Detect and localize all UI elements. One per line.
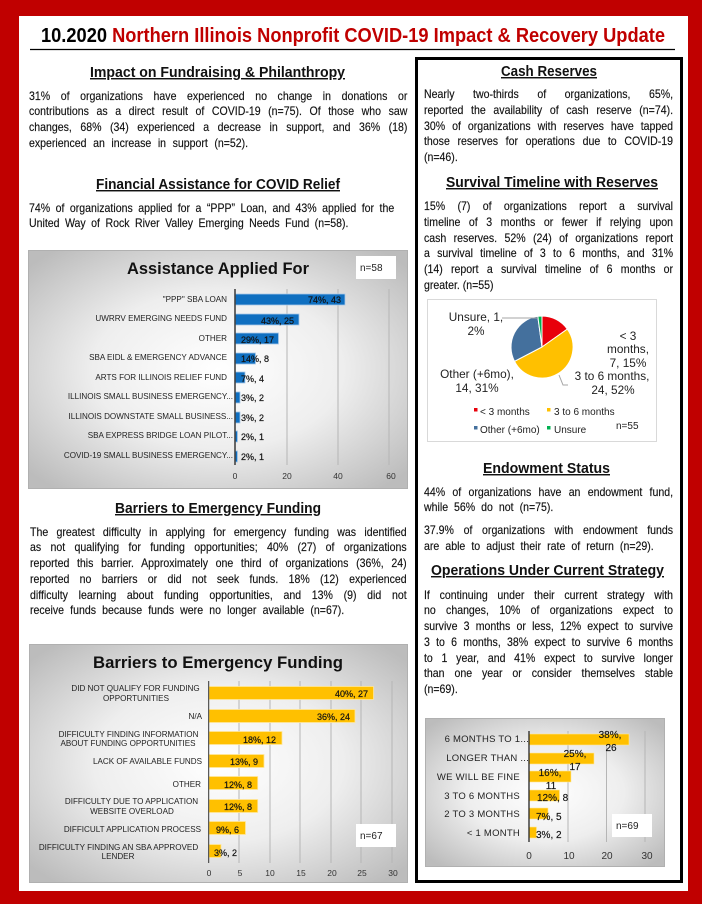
axis ticks: 10 <box>563 851 575 862</box>
value labels: 3%, 2 <box>536 830 562 841</box>
value labels: 36%, 24 <box>317 712 350 722</box>
bar chart: Barriers to Emergency Funding <box>30 644 408 882</box>
value labels: 7%, 4 <box>241 374 264 384</box>
category labels: OTHER <box>199 334 227 343</box>
n label <box>356 824 396 847</box>
text: fundraising impact paragraph: changes, 68% (34) experienced a decrease in support, and 36% (18) <box>28 120 407 134</box>
legend: 3 to 6 months <box>554 407 615 418</box>
value labels: 14%, 8 <box>241 354 269 364</box>
axis ticks: 0 <box>233 471 238 481</box>
legend: Unsure <box>554 425 587 436</box>
n label: n=67 <box>360 831 383 842</box>
text: operations paragraph: than one year or consider themselves stable <box>424 666 673 680</box>
axis ticks: 0 <box>526 851 532 862</box>
pie chart: survival timeline <box>428 300 656 442</box>
text: endowment paragraph one: 44% of organizations have an endowment fund, <box>424 484 673 498</box>
data labels: < 3 <box>620 329 637 343</box>
text: fundraising impact paragraph <box>28 88 408 150</box>
bars <box>209 686 374 858</box>
value labels <box>241 295 341 462</box>
category labels <box>64 295 233 460</box>
text: fundraising impact paragraph: contributions as a direct result of COVID-19 (n=75). Of those who saw <box>28 104 407 118</box>
category labels: LACK OF AVAILABLE FUNDS <box>93 757 203 766</box>
data labels: 7, 15% <box>610 356 647 370</box>
text: financial assistance paragraph: 74% of organizations applied for a “PPP” Loan, and 43% applied for the <box>28 200 394 214</box>
value labels <box>536 730 621 841</box>
heading: Survival Timeline with Reserves: Survival Timeline with Reserves <box>446 175 658 191</box>
category labels <box>39 684 203 861</box>
category labels: DIFFICULTY DUE TO APPLICATION <box>65 797 198 806</box>
heading: Endowment Status: Endowment Status <box>483 461 610 477</box>
text: fundraising impact paragraph: experienced an increase in support (n=52). <box>28 136 248 150</box>
value labels: 18%, 12 <box>243 735 276 745</box>
bars <box>235 294 345 462</box>
text: cash reserves paragraph <box>424 87 673 164</box>
category labels: OPPORTUNITIES <box>103 694 170 703</box>
text: operations paragraph: no changes, 10% of organizations expect to <box>424 603 673 617</box>
value labels: 29%, 17 <box>241 335 274 345</box>
title: 10.2020 Northern Illinois Nonprofit COVID-19 Impact & Recovery Update <box>41 25 665 47</box>
text: survival timeline paragraph: 15% (7) of organizations report a survival <box>424 199 673 213</box>
axis ticks: 0 <box>207 868 212 878</box>
text: fundraising impact paragraph: 31% of organizations have experienced no change in donations or <box>28 88 407 102</box>
category labels: DIFFICULT APPLICATION PROCESS <box>64 825 202 834</box>
axis ticks: 20 <box>327 868 337 878</box>
category labels: N/A <box>188 712 203 721</box>
axis ticks: 30 <box>641 851 653 862</box>
text: barriers paragraph: as not qualifying for funding opportunities; 40% (27) of organizations <box>30 540 407 554</box>
value labels: 2%, 1 <box>241 432 264 442</box>
text: survival timeline paragraph: a survival timeline of 3 to 6 months, and 31% <box>424 246 673 260</box>
category labels: DID NOT QUALIFY FOR FUNDING <box>71 684 200 693</box>
text: cash reserves paragraph: 30% of organizations with reserves have tapped <box>424 119 673 133</box>
category labels: WEBSITE OVERLOAD <box>90 807 174 816</box>
n label <box>612 814 652 837</box>
text: operations paragraph: survive 3 months or less, 12% expect to survive <box>424 619 673 633</box>
axis ticks <box>233 471 396 481</box>
text: financial assistance paragraph <box>28 200 394 230</box>
axis ticks: 20 <box>282 471 292 481</box>
category labels: "PPP" SBA LOAN <box>163 295 227 304</box>
category labels: SBA EXPRESS BRIDGE LOAN PILOT... <box>88 431 233 440</box>
text: endowment paragraph two <box>424 523 673 553</box>
axis ticks: 15 <box>296 868 306 878</box>
heading: Barriers to Emergency Funding: Barriers to Emergency Funding <box>115 501 321 517</box>
legend: n=55 <box>616 421 639 432</box>
category labels: < 1 MONTH <box>467 828 520 839</box>
text: operations paragraph <box>424 588 673 696</box>
value labels: 12%, 8 <box>537 793 569 804</box>
text: endowment paragraph two: 37.9% of organizations with endowment funds <box>424 523 673 537</box>
value labels: 11 <box>546 781 557 792</box>
value labels: 12%, 8 <box>224 802 252 812</box>
category labels: WE WILL BE FINE <box>437 772 520 783</box>
value labels: 13%, 9 <box>230 757 258 767</box>
category labels: DIFFICULTY FINDING AN SBA APPROVED <box>39 843 198 852</box>
category labels: 2 TO 3 MONTHS <box>444 809 520 820</box>
value labels: 43%, 25 <box>261 316 294 326</box>
text: endowment paragraph two: are able to adjust their rate of return (n=29). <box>424 539 653 553</box>
value labels: 16%, <box>539 768 561 779</box>
value labels: 17 <box>569 762 581 773</box>
category labels: LONGER THAN ... <box>446 753 529 764</box>
axis ticks <box>207 868 398 878</box>
text: operations paragraph: If continuing under their current strategy with <box>424 588 673 602</box>
value labels: 9%, 6 <box>216 825 239 835</box>
bar chart: Assistance Applied For <box>28 250 408 488</box>
text: cash reserves paragraph: Nearly two-thirds of organizations, 65%, <box>424 87 673 101</box>
bars <box>529 734 629 838</box>
category labels: ILLINOIS DOWNSTATE SMALL BUSINESS... <box>69 412 233 421</box>
category labels: ABOUT FUNDING OPPORTUNITIES <box>60 739 196 748</box>
text: cash reserves paragraph: (n=46). <box>424 150 457 164</box>
axis ticks: 25 <box>357 868 367 878</box>
category labels: SBA EIDL & EMERGENCY ADVANCE <box>89 353 228 362</box>
chart title: Assistance Applied For <box>127 259 309 278</box>
text: operations paragraph: 3 to 6 months, 38% expect to survive 6 months <box>424 635 673 649</box>
text: operations paragraph: (n=69). <box>424 682 457 696</box>
panel: right column black frame <box>415 57 683 883</box>
value labels: 74%, 43 <box>308 295 341 305</box>
value labels: 3%, 2 <box>214 848 237 858</box>
data labels: 2% <box>467 324 485 338</box>
category labels: DIFFICULTY FINDING INFORMATION <box>59 730 199 739</box>
value labels: 3%, 2 <box>241 413 264 423</box>
category labels: COVID-19 SMALL BUSINESS EMERGENCY... <box>64 451 233 460</box>
data labels: Unsure, 1, <box>449 310 503 324</box>
value labels: 12%, 8 <box>224 780 252 790</box>
data labels: months, <box>607 342 649 356</box>
value labels: 7%, 5 <box>536 812 562 823</box>
text: cash reserves paragraph: those reserves for operations due to COVID-19 <box>424 134 673 148</box>
category labels: 6 MONTHS TO 1... <box>445 734 529 745</box>
category labels: 3 TO 6 MONTHS <box>444 791 520 802</box>
data labels <box>440 310 649 397</box>
legend <box>474 407 639 436</box>
heading: Impact on Fundraising & Philanthropy: Impact on Fundraising & Philanthropy <box>90 65 345 81</box>
chart title: Barriers to Emergency Funding <box>93 653 343 672</box>
axis ticks: 20 <box>601 851 613 862</box>
category labels <box>437 734 529 839</box>
legend: Other (+6mo) <box>480 425 540 436</box>
value labels: 2%, 1 <box>241 452 264 462</box>
value labels: 26 <box>605 743 617 754</box>
text: survival timeline paragraph <box>424 199 674 292</box>
text: financial assistance paragraph: United Way of Rock River Valley Emerging Needs Fund (n=58). <box>28 216 348 230</box>
text: operations paragraph: to 1 year, and 41% expect to survive longer <box>424 651 673 665</box>
value labels <box>214 689 368 858</box>
pie slices <box>511 316 573 378</box>
text: survival timeline paragraph: timeline of 3 months or fewer if relying upon <box>424 215 673 229</box>
category labels: OTHER <box>173 780 201 789</box>
category labels: LENDER <box>102 852 135 861</box>
text: endowment paragraph one: while 56% do not (n=75). <box>424 500 553 514</box>
text: endowment paragraph one <box>424 484 673 514</box>
axis ticks: 40 <box>333 471 343 481</box>
value labels: 38%, <box>599 730 621 741</box>
value labels: 40%, 27 <box>335 689 368 699</box>
axis ticks: 60 <box>386 471 396 481</box>
axis ticks: 30 <box>388 868 398 878</box>
heading: Cash Reserves: Cash Reserves <box>501 64 597 80</box>
n label <box>356 256 396 279</box>
text: survival timeline paragraph: cash reserves. 52% (24) of organizations report <box>424 231 673 245</box>
axis ticks: 10 <box>265 868 275 878</box>
axis ticks: 5 <box>238 868 243 878</box>
n label: n=69 <box>616 821 639 832</box>
axis ticks <box>526 851 653 862</box>
text: survival timeline paragraph: (14) report a survival timeline of 6 months or <box>424 262 673 276</box>
data labels: 24, 52% <box>591 383 635 397</box>
heading: Financial Assistance for COVID Relief: Financial Assistance for COVID Relief <box>96 177 340 193</box>
category labels: UWRRV EMERGING NEEDS FUND <box>95 314 227 323</box>
data labels: 3 to 6 months, <box>575 369 649 383</box>
legend: < 3 months <box>480 407 530 418</box>
bar chart: operations under current strategy <box>426 718 664 866</box>
text: barriers paragraph: The greatest difficulty in applying for emergency funding was identified <box>30 524 407 538</box>
text: barriers paragraph: difficulty learning about funding opportunities, and 13% (9) did not <box>30 588 407 602</box>
data labels: 14, 31% <box>455 381 499 395</box>
category labels: ARTS FOR ILLINOIS RELIEF FUND <box>95 373 227 382</box>
heading: Operations Under Current Strategy: Operations Under Current Strategy <box>431 563 664 579</box>
text: barriers paragraph: receive funds because funds were no longer available (n=67). <box>30 603 344 617</box>
text: cash reserves paragraph: reported the availability of cash reserve (n=74). <box>424 103 673 117</box>
category labels: ILLINOIS SMALL BUSINESS EMERGENCY... <box>68 392 233 401</box>
text: barriers paragraph: reported no barriers or did not seek funds. 18% (12) experienced <box>30 572 407 586</box>
n label: n=58 <box>360 263 383 274</box>
value labels: 25%, <box>564 749 586 760</box>
value labels: 3%, 2 <box>241 393 264 403</box>
text: barriers paragraph <box>30 524 407 617</box>
text: survival timeline paragraph: greater. (n=55) <box>424 278 493 292</box>
text: barriers paragraph: reported this barrier. Approximately one third of organizations (36%, 24) <box>30 556 407 570</box>
data labels: Other (+6mo), <box>440 367 514 381</box>
